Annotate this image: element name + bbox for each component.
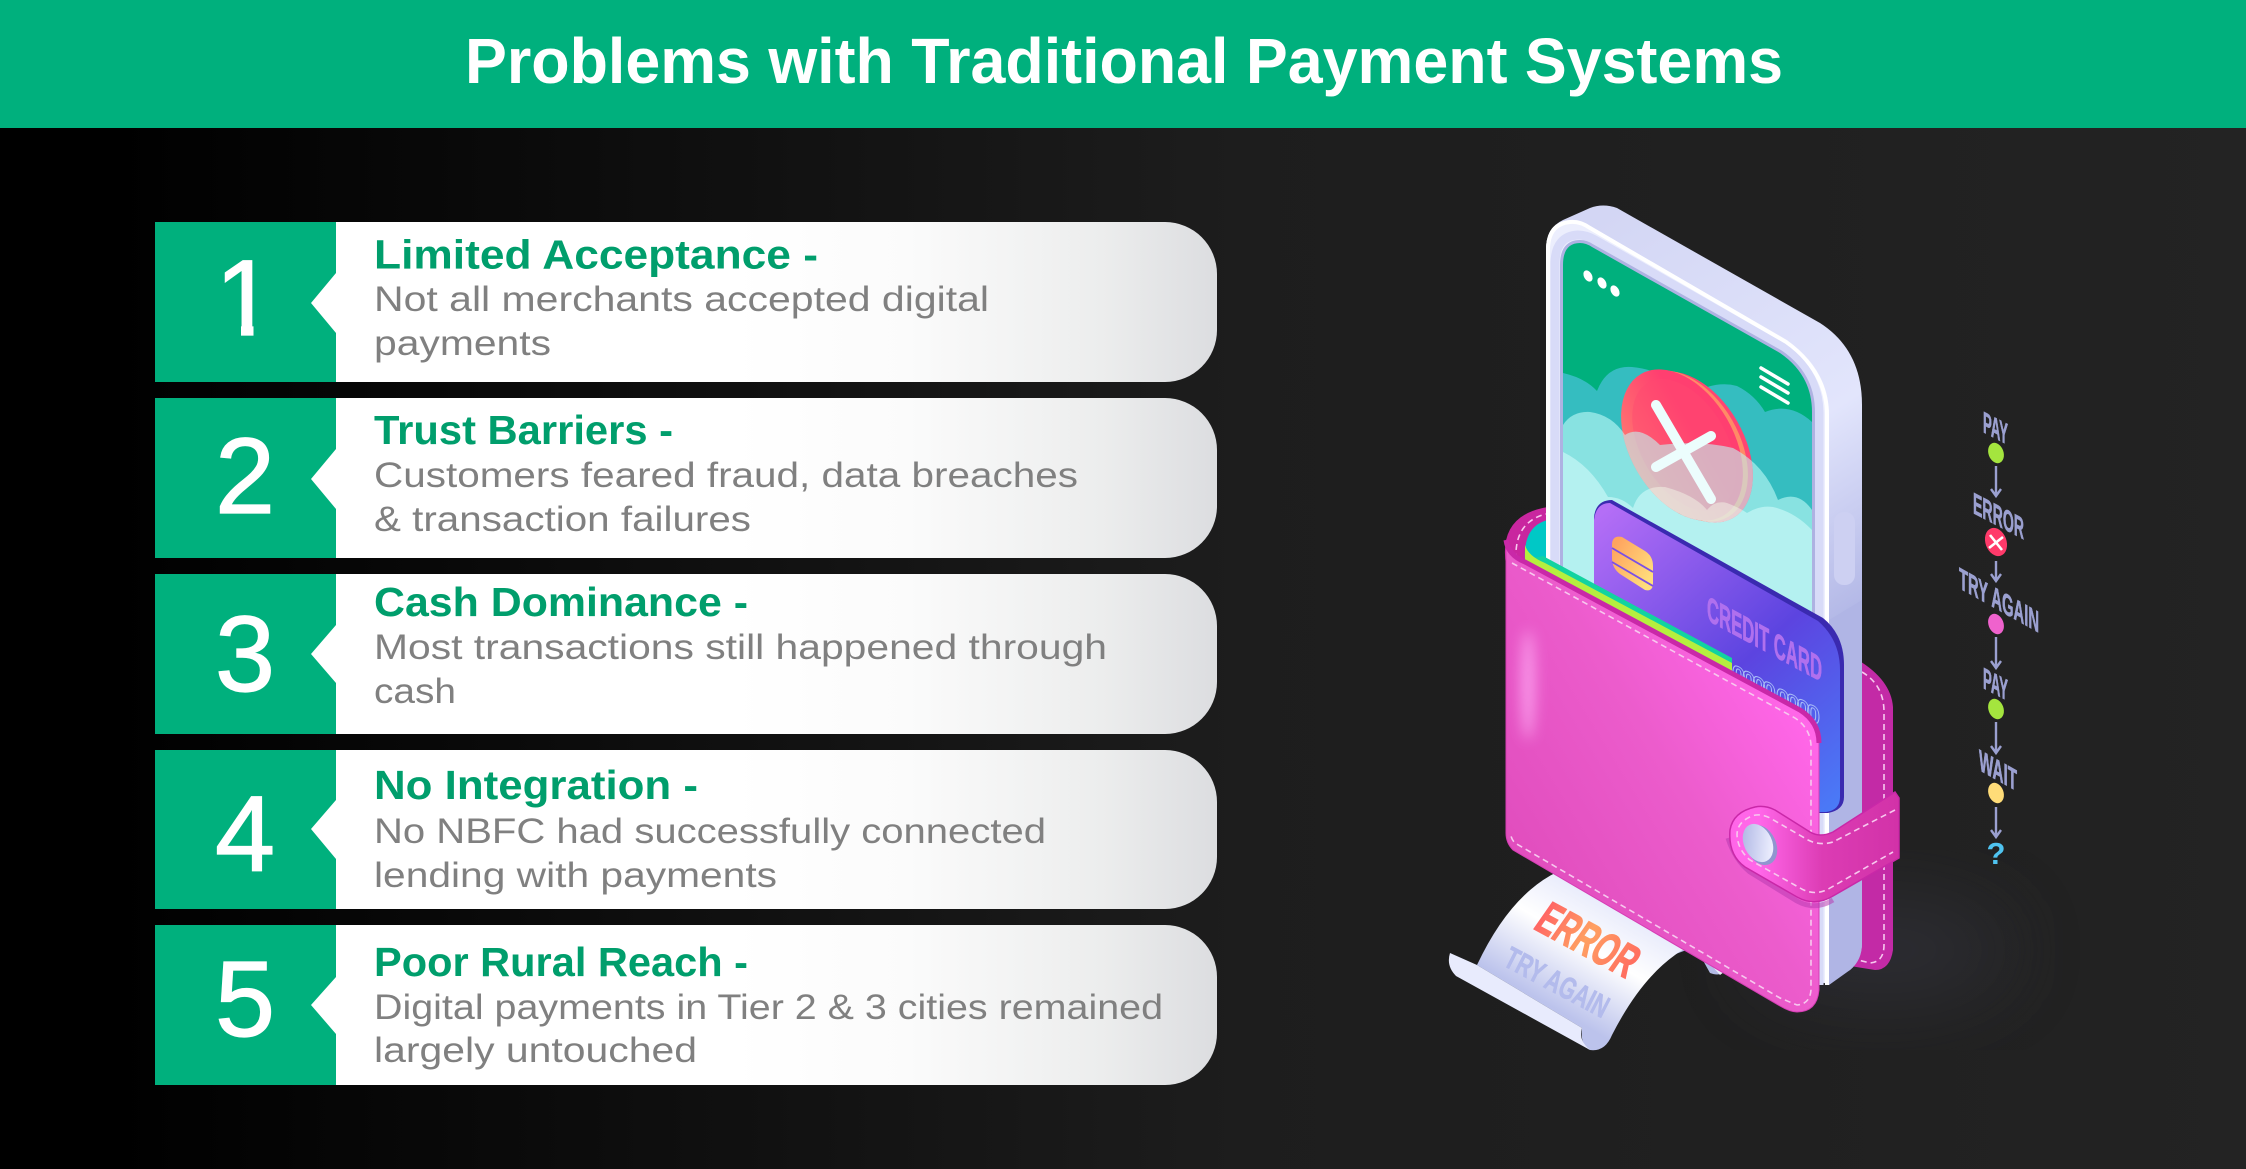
arrow xyxy=(1991,637,2001,668)
snap button xyxy=(1737,819,1783,870)
arrow xyxy=(1991,807,2001,837)
phone right lower side xyxy=(1829,600,1862,985)
heading 4: No Integration - xyxy=(374,762,698,808)
phone xyxy=(1546,206,1862,985)
flow: payment attempts: PAY xyxy=(1983,405,2008,452)
card number: 0000 0000 xyxy=(1732,659,1820,731)
menu icon xyxy=(1761,368,1788,403)
panel: problem 1: payments xyxy=(374,324,551,363)
flow dot pink xyxy=(1985,612,2007,636)
illustration: phone in wallet xyxy=(1449,206,1899,1050)
wallet strap xyxy=(1728,792,1899,906)
credit card xyxy=(1594,500,1844,813)
screen dots xyxy=(1583,270,1620,297)
arrow xyxy=(1991,466,2001,496)
arrow xyxy=(1991,561,2001,581)
wallet pockets xyxy=(1525,545,1732,700)
number 1: 1 xyxy=(215,237,275,358)
flow: payment attempts: PAY xyxy=(1983,661,2008,708)
wallet back cover xyxy=(1850,660,1893,970)
number 3: 3 xyxy=(215,593,275,714)
flow icon error xyxy=(1981,525,2011,559)
flap highlight xyxy=(1521,630,1535,740)
text 5: Digital payments in Tier 2 & 3 cities remained xyxy=(374,988,1163,1027)
flow dot green xyxy=(1985,697,2007,721)
panel: problem 3 xyxy=(155,574,1217,734)
coin cloud overlay xyxy=(1622,432,1753,523)
heading 3: Cash Dominance - xyxy=(374,579,748,625)
panel: problem 2 xyxy=(155,398,1217,558)
credit card: CREDIT CARD xyxy=(1707,588,1822,690)
cloud back xyxy=(1563,366,1812,510)
heading 2: Trust Barriers - xyxy=(374,407,673,453)
coin cross xyxy=(1656,405,1711,499)
number 5: 5 xyxy=(215,938,275,1059)
floor glow xyxy=(1750,900,2010,1000)
panel: problem 3: cash xyxy=(374,672,456,711)
arrow xyxy=(1991,722,2001,753)
cloud front xyxy=(1563,452,1812,612)
panel: problem 4 xyxy=(155,750,1217,909)
flow label WAIT: WAIT xyxy=(1979,743,2017,798)
flow question mark: ? xyxy=(1987,836,2005,871)
panel: problem 2: & transaction failures xyxy=(374,500,751,539)
flow: payment attempts: ERROR xyxy=(1973,486,2024,546)
phone screen xyxy=(1563,243,1812,612)
number 4: 4 xyxy=(215,773,275,894)
title: Problems with Traditional Payment Systems xyxy=(465,25,1783,97)
cloud middle xyxy=(1563,412,1812,530)
text 1: Not all merchants accepted digital xyxy=(374,280,989,319)
flap stitching xyxy=(1511,563,1811,1005)
text 2: Customers feared fraud, data breaches xyxy=(374,456,1078,495)
receipt error text: ERROR xyxy=(1526,893,1650,988)
receipt xyxy=(1449,872,1740,1050)
flow: payment attempts xyxy=(1959,405,2039,871)
side button xyxy=(1834,512,1855,585)
flow dot green xyxy=(1985,441,2007,465)
panel: problem 5: largely untouched xyxy=(374,1031,697,1070)
wallet rim xyxy=(1505,507,1548,600)
card chip xyxy=(1612,537,1653,590)
text 4: No NBFC had successfully connected xyxy=(374,812,1046,851)
text 3: Most transactions still happened through xyxy=(374,628,1107,667)
heading 5: Poor Rural Reach - xyxy=(374,939,748,985)
heading 1: Limited Acceptance - xyxy=(374,232,818,278)
infographic canvas: TRY AGAIN xyxy=(1959,561,2039,639)
flow dot yellow xyxy=(1985,781,2007,805)
error coin xyxy=(1621,369,1753,523)
panel: problem 5 xyxy=(155,925,1217,1085)
receipt try again text: TRY AGAIN xyxy=(1499,940,1615,1025)
panel: problem 4: lending with payments xyxy=(374,856,777,895)
number 2: 2 xyxy=(215,415,275,536)
title bar xyxy=(0,0,2246,128)
panel: problem 1 xyxy=(155,222,1217,382)
strap stitching xyxy=(1737,810,1895,892)
wallet front flap xyxy=(1506,540,1819,1012)
